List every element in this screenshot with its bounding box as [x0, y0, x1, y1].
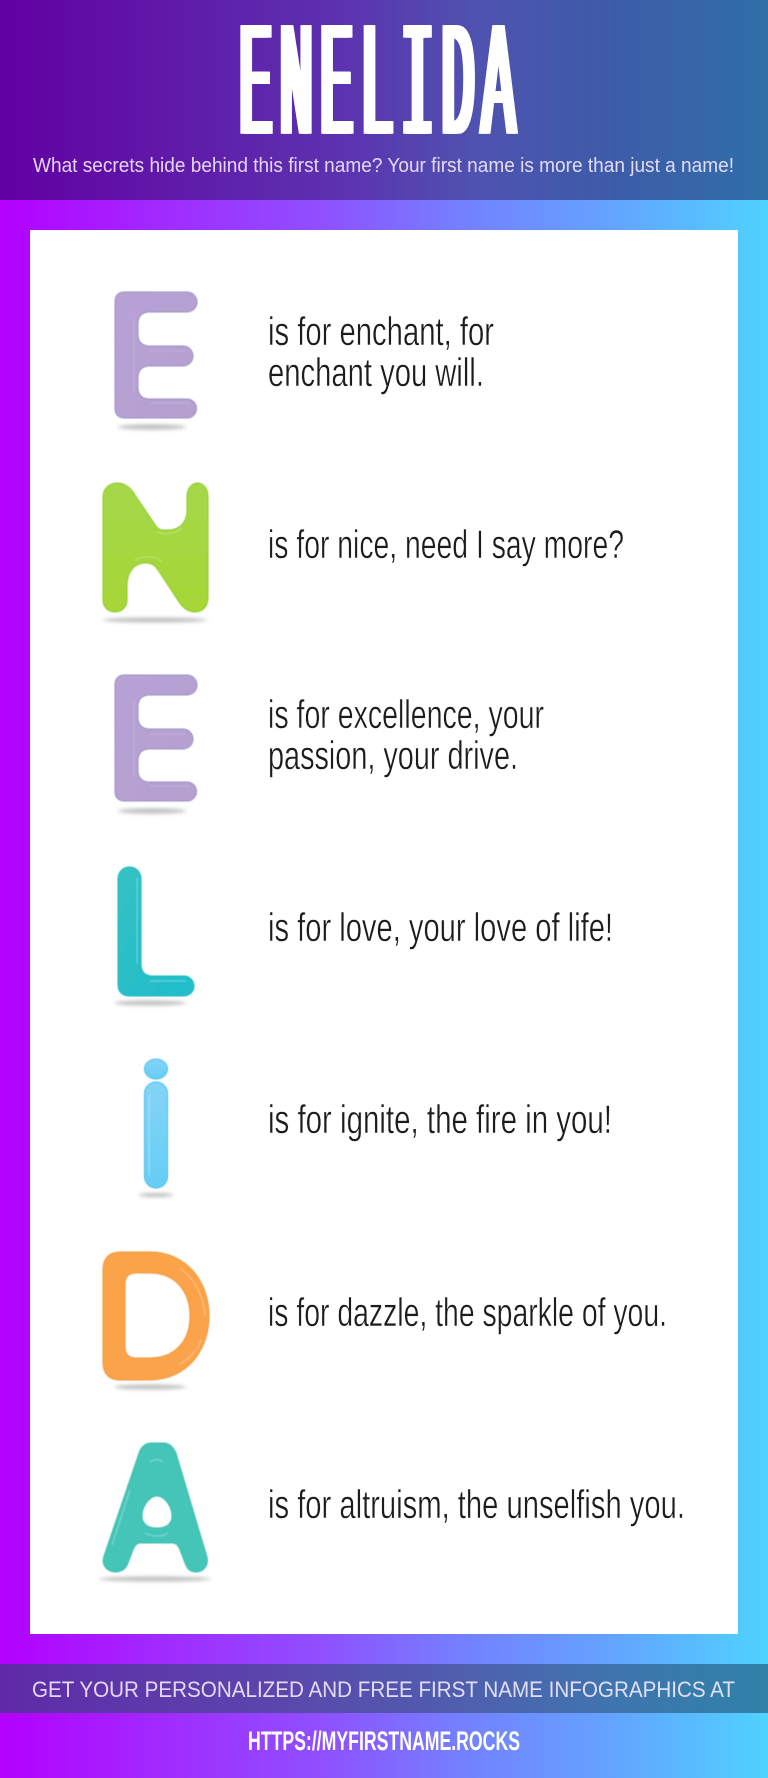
- row: letter N nice: [103, 483, 624, 622]
- icon: letter D: [103, 1252, 209, 1389]
- icon: letter L: [114, 867, 194, 1005]
- text: excellence: is for excellence, your: [268, 693, 544, 737]
- text: ignite: is for ignite, the fire in you!: [268, 1098, 612, 1142]
- header band: [0, 0, 768, 200]
- row: letter A altruism: [99, 1443, 685, 1581]
- row: letter E excellence: [115, 675, 544, 814]
- text: enchant: is for enchant, for: [268, 310, 494, 354]
- icon: letter A: [99, 1443, 211, 1581]
- subtitle: What secrets hide behind this first name? Your first name is more than just a name!: [33, 155, 734, 177]
- title: ENELIDA: [236, 0, 519, 185]
- icon: letter E: [115, 292, 197, 430]
- row: letter i ignite: [139, 1059, 612, 1197]
- text: excellence: [268, 693, 544, 778]
- footer band: [0, 1664, 768, 1713]
- icon: letter E: [115, 675, 197, 814]
- icon: letter N: [103, 483, 208, 622]
- text: love: is for love, your love of life!: [268, 906, 613, 950]
- text: nice: is for nice, need I say more?: [268, 523, 624, 567]
- text: enchant: enchant you will.: [268, 351, 484, 395]
- row: letter L love: [114, 867, 613, 1005]
- footer call to action: GET YOUR PERSONALIZED AND FREE FIRST NAME INFOGRAPHICS AT: [32, 1677, 735, 1702]
- row: letter D dazzle: [103, 1252, 667, 1389]
- text: excellence: passion, your drive.: [268, 734, 518, 778]
- icon: letter i: [139, 1059, 173, 1197]
- footer url: HTTPS://MYFIRSTNAME.ROCKS: [248, 1726, 520, 1756]
- panel: white letter list: [30, 230, 738, 1634]
- text: enchant: [268, 310, 494, 395]
- row: letter E enchant: [115, 292, 494, 430]
